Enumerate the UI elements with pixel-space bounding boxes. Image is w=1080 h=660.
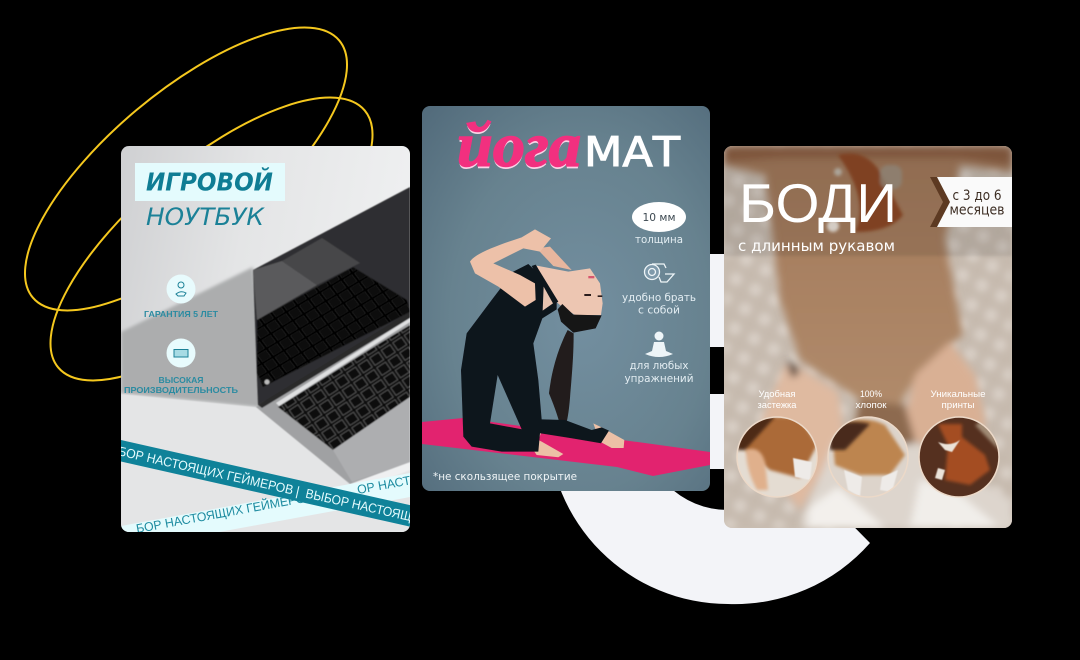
pink mat xyxy=(422,418,710,476)
circle: fastener xyxy=(737,417,817,497)
icon: warranty xyxy=(166,274,196,304)
teal ribbon: ВЫБОР НАСТОЯЩИХ xyxy=(304,486,430,528)
feature labels: хлопок xyxy=(856,400,887,411)
title line 1: ИГРОВОЙ xyxy=(146,168,273,196)
teal ribbon: ВЫБОР НАСТОЯЩИХ ГЕЙМЕРОВ xyxy=(98,439,295,497)
feature labels: застежка xyxy=(758,400,797,411)
age tag: месяцев xyxy=(950,202,1004,218)
title: yoga script: йога xyxy=(457,112,581,180)
exercise label: для любых xyxy=(630,359,689,372)
laptop photo xyxy=(253,187,410,484)
feature labels: Уникальные xyxy=(930,389,986,400)
thickness label: толщина xyxy=(635,233,683,246)
window shadow xyxy=(121,267,265,408)
icon: battery xyxy=(166,338,196,368)
teal ribbon: | xyxy=(294,483,301,499)
title line 2: НОУТБУК xyxy=(146,203,265,231)
performance label xyxy=(124,377,238,394)
exercise label xyxy=(624,360,693,384)
subtitle: с длинным рукавом xyxy=(738,237,895,255)
blurred baby photo xyxy=(724,146,1012,528)
circle: cotton xyxy=(828,417,908,497)
title: БОДИ xyxy=(739,172,897,234)
feature labels: принты xyxy=(942,400,975,411)
card background xyxy=(422,106,710,491)
light ribbon xyxy=(121,473,410,532)
title: yoga script: йога xyxy=(457,114,581,182)
exercise label: упражнений xyxy=(624,372,694,385)
feature labels xyxy=(758,389,986,411)
carry label xyxy=(622,292,696,314)
age tag xyxy=(930,177,1012,227)
top dim xyxy=(724,146,1012,256)
light ribbon: ОР НАСТ xyxy=(356,473,412,497)
performance label: ВЫСОКАЯ xyxy=(158,375,204,385)
feet xyxy=(528,423,624,457)
eyes and lips xyxy=(584,294,602,297)
thickness pill xyxy=(632,202,686,232)
yellow ellipse outlines xyxy=(0,0,414,427)
carry label: с собой xyxy=(638,304,680,316)
back arm xyxy=(537,247,572,270)
ponytail xyxy=(549,330,574,421)
age tag: с 3 до 6 xyxy=(952,188,1002,204)
feature labels: 100% xyxy=(860,389,882,400)
card background xyxy=(121,146,410,532)
icon: meditation xyxy=(645,332,673,357)
woman in yoga pose xyxy=(461,229,624,457)
panel: gaming laptop card xyxy=(121,146,410,532)
teal ribbon xyxy=(121,440,410,526)
icon: rolled mat xyxy=(644,264,674,282)
circle: fox print xyxy=(919,417,999,497)
title highlight xyxy=(135,163,285,201)
panel: baby bodysuit card xyxy=(724,146,1012,528)
decorative white ring behind cards xyxy=(548,254,870,604)
front arm and hand xyxy=(470,229,551,307)
performance label: ПРОИЗВОДИТЕЛЬНОСТЬ xyxy=(124,385,238,395)
title: mat: МАТ xyxy=(584,128,681,176)
panel: yoga mat card xyxy=(422,106,710,491)
carry label: удобно брать xyxy=(622,291,696,304)
hair xyxy=(558,304,602,333)
blanket background xyxy=(724,146,1012,528)
skin: chest and face xyxy=(537,266,603,315)
warranty label: ГАРАНТИЯ 5 ЛЕТ xyxy=(144,309,219,319)
floor xyxy=(121,394,410,532)
feature labels: Удобная xyxy=(758,389,796,400)
black bodysuit xyxy=(461,264,609,452)
light ribbon: БОР НАСТОЯЩИХ ГЕЙМЕРОВ xyxy=(135,489,315,536)
fox print xyxy=(827,153,903,232)
thickness pill: 10 мм xyxy=(642,211,676,224)
footnote: *не скользящее покрытие xyxy=(433,470,577,483)
blanket texture xyxy=(724,146,1012,528)
